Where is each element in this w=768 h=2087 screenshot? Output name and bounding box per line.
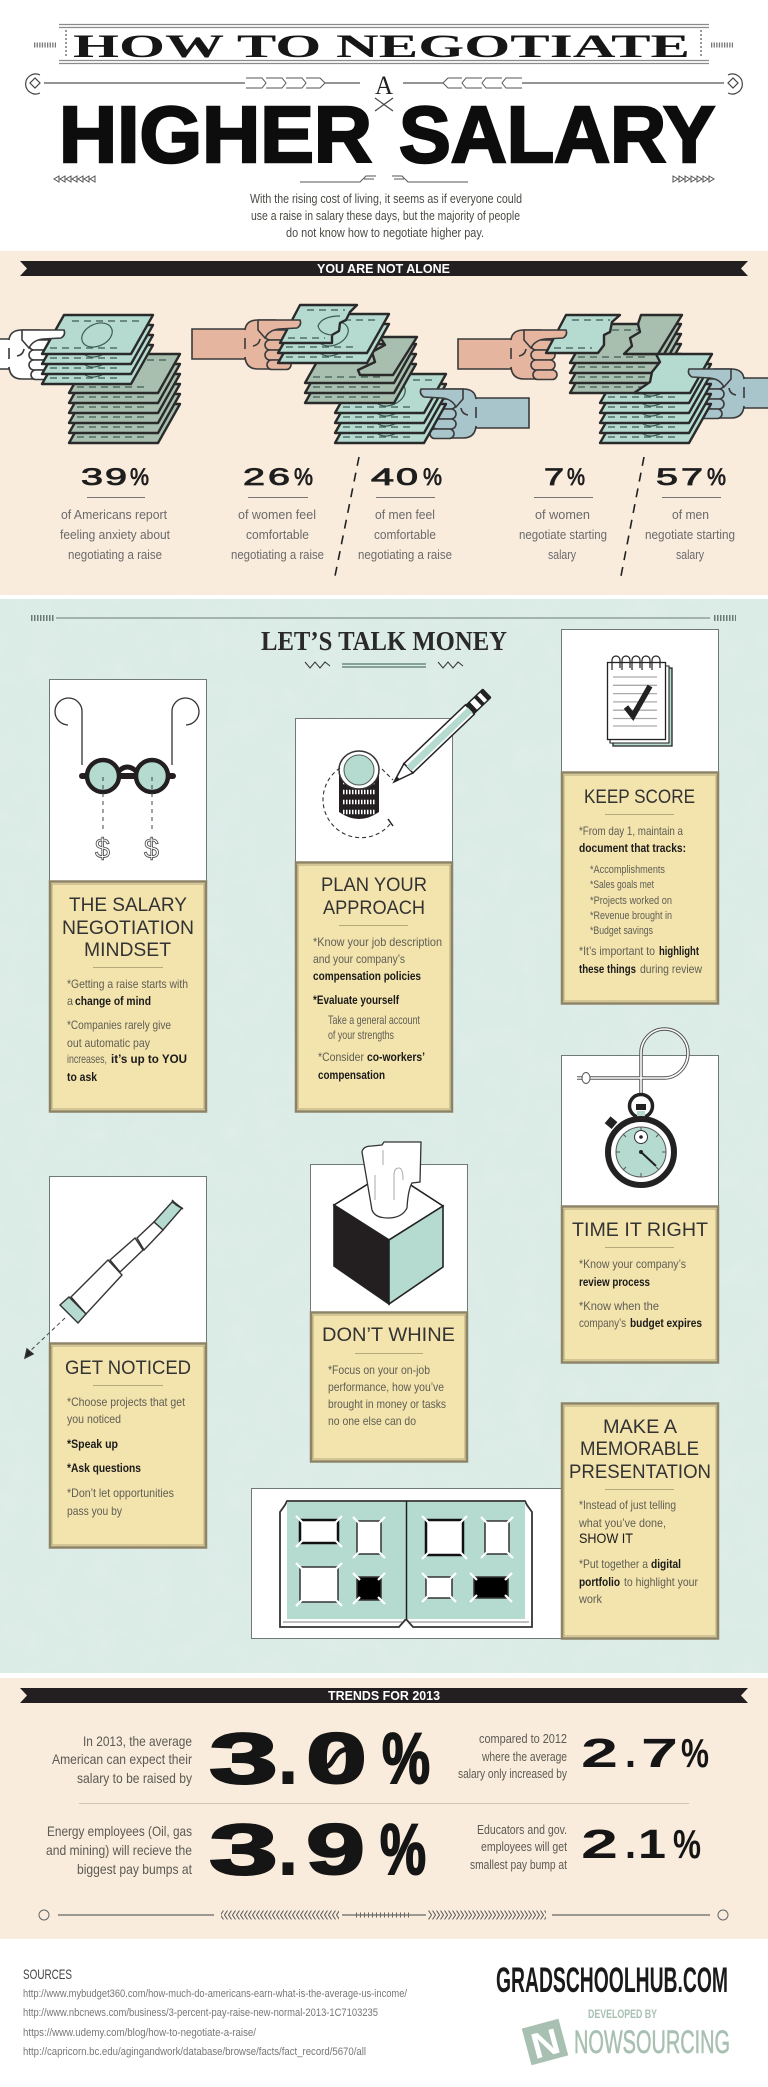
body text: presentation tips: *Instead of just telling [579,1498,676,1512]
card: keep score text: *Projects worked on [590,895,672,907]
card: get noticed text: you noticed [67,1412,121,1426]
text: energy employees: Energy employees (Oil, gas [47,1823,192,1839]
card: time it right text: *Know when the [579,1299,659,1313]
stat: 26 percent: 2 [243,464,265,491]
illustration: pink and blue hands with money stacks, 26 and 40 percent [192,305,529,443]
logo: nowsourcing [522,2019,730,2068]
text: compared to 2012: where the average [481,1749,567,1764]
stat: 40 percent: comfortable [374,527,436,542]
big number: 3.9 percent: 9 [306,1811,365,1890]
stat: 40 percent: negotiating a raise [358,547,452,562]
card: keep score text: *It’s important to [579,944,655,958]
text: energy employees: and mining) will recieve the [46,1842,192,1858]
card: mindset text: it’s up to YOU [111,1052,187,1066]
stat: 26 percent [231,464,324,562]
stat: 39 percent [60,464,170,562]
body text: presentation tips: to highlight your [624,1575,698,1589]
stat: 57 percent: salary [676,547,704,562]
stat: 39 percent: % [130,464,149,491]
number: 2.7 percent: 2 [581,1730,618,1776]
text: energy employees: biggest pay bumps at [77,1861,192,1877]
card: get noticed text: *Don’t let opportunities [67,1486,174,1500]
body text: presentation tips [578,1498,698,1606]
text: compared to 2012: compared to 2012 [479,1731,567,1746]
intro text: use a raise in salary these days, but the majority of people [251,208,520,223]
stat: 26 percent: 6 [268,464,290,491]
stat: 57 percent [645,464,735,562]
stat: 57 percent: negotiate starting [645,527,735,542]
card: don't whine text: DON’T WHINE [322,1325,455,1346]
number: 2.7 percent: 7 [641,1730,678,1776]
card: keep score text: *Budget savings [590,925,653,937]
big number: 3.0 percent: 0 [306,1720,367,1799]
panel: don't whine [310,1142,468,1462]
card: mindset text [50,882,206,1112]
icon: telescope [25,1200,183,1358]
card: plan text: PLAN YOUR [321,875,427,896]
card: get noticed text: GET NOTICED [65,1358,191,1379]
heading: make a memorable presentation: MEMORABLE [580,1439,699,1460]
heading: make a memorable presentation: MAKE A [603,1417,677,1438]
number: 2.7 percent: . [625,1730,636,1776]
card: keep score text: during review [640,962,702,976]
card: get noticed text: *Choose projects that get [67,1395,186,1409]
card: mindset text: *Getting a raise starts with [67,977,188,991]
panel: you are not alone [0,251,768,595]
text: compared to 2012: salary only increased by [458,1766,567,1781]
stat: 39 percent: feeling anxiety about [60,527,170,542]
card: mindset text: MINDSET [84,940,171,961]
illustration: white hand holding money stacks [0,315,180,443]
stat: 40 percent [358,464,452,562]
card: keep score text: KEEP SCORE [584,787,695,808]
text: educators and government: smallest pay bump at [470,1857,567,1872]
card: mindset text: THE SALARY [69,895,187,916]
panel: the salary negotiation mindset [50,680,206,1112]
text: energy employees [46,1823,192,1877]
sources: http://capricorn.bc.edu/agingandwork/database/browse/facts/fact_record/5670/all [23,2046,366,2058]
card: plan text: and your company’s [313,952,405,966]
card: keep score text: highlight [659,944,699,958]
big number: 3.0 percent: . [279,1720,297,1799]
card: time it right text: company’s [579,1316,626,1330]
heading: make a memorable presentation [569,1417,711,1483]
dashed divider 1 [335,457,359,576]
ribbon heading: you are not alone: YOU ARE NOT ALONE [317,262,450,276]
big number: 3.0 percent [209,1720,430,1799]
big number: 3.9 percent [209,1811,426,1890]
card: mindset text: change of mind [75,994,151,1008]
ribbon heading: trends for 2013 [20,1688,748,1703]
dashed divider 2 [621,457,644,576]
stat: 7 percent: of women [535,507,590,522]
card: plan text: *Know your job description [313,935,442,949]
panel: portfolio book [252,1488,562,1638]
icon: stopwatch [577,1029,688,1185]
big number: 3.9 percent: % [380,1811,426,1890]
text: average raise 2013: In 2013, the average [83,1733,192,1749]
ornament line with the word A [26,71,742,111]
stat: 7 percent [519,464,607,562]
footer [23,1961,730,2068]
card: mindset text: to ask [67,1070,97,1084]
body text: presentation tips: SHOW IT [579,1530,633,1546]
card: time it right text: TIME IT RIGHT [572,1220,708,1241]
card: get noticed text: *Speak up [67,1437,118,1451]
text: compared to 2012 [458,1731,567,1781]
intro text: do not know how to negotiate higher pay. [286,225,484,240]
card: time it right text: budget expires [630,1316,702,1330]
title: higher salary: SALARY [399,90,715,179]
sources: SOURCES [23,1966,72,1982]
stat: 7 percent: 7 [544,464,564,491]
panel: keep score [562,630,718,1004]
card: keep score text: these things [579,962,636,976]
stat: 7 percent: negotiate starting [519,527,607,542]
body text: presentation tips: *Put together a [579,1557,648,1571]
heading: make a memorable presentation: PRESENTATION [569,1462,711,1483]
stat: 26 percent: of women feel [238,507,316,522]
big number: 3.9 percent: 3 [209,1811,278,1890]
text: educators and government: Educators and gov. [477,1822,567,1837]
card: keep score text: *Accomplishments [590,864,665,876]
title: higher salary [59,90,715,179]
stat: 40 percent: of men feel [375,507,435,522]
card: don't whine text: *Focus on your on-job [328,1363,430,1377]
number: 2.1 percent [581,1821,701,1867]
card: plan text: Take a general account [328,1013,420,1027]
title banner: how to negotiate: HOW TO NEGOTIATE [73,29,690,65]
title: higher salary: HIGHER [59,90,372,179]
stat: 39 percent: 9 [105,464,127,491]
ornament line with the word A: A [375,71,393,100]
card: plan text [296,862,452,1112]
card: keep score text: *Revenue brought in [590,910,672,922]
card: plan text: of your strengths [328,1028,394,1042]
card: plan text: APPROACH [323,898,425,919]
heading: let's talk money: LET’S TALK MONEY [261,626,507,656]
icon: coin stack and dashed circle [323,751,393,838]
ribbon heading: you are not alone [20,261,748,276]
heading: let's talk money [261,626,507,668]
stat: 39 percent: 3 [81,464,103,491]
card: time it right text: review process [579,1275,650,1289]
card: plan text: compensation [318,1068,385,1082]
card: get noticed text: *Ask questions [67,1461,141,1475]
header [26,24,742,240]
body text: presentation tips: portfolio [579,1575,620,1589]
stat: 39 percent: negotiating a raise [68,547,162,562]
small ornaments under title [54,176,714,182]
stat: 26 percent: negotiating a raise [231,547,324,562]
stat: 57 percent: % [707,464,726,491]
sources [23,1966,408,2058]
stat: 7 percent: % [567,464,585,491]
card: don't whine text: brought in money or tasks [328,1397,446,1411]
card: plan text: *Evaluate yourself [313,993,400,1007]
stat: 26 percent: % [294,464,313,491]
stat: 40 percent: % [423,464,442,491]
stat: 26 percent: comfortable [246,527,309,542]
icon: notepad with checkmark [608,656,672,746]
stat: 57 percent: of men [672,507,709,522]
number: 2.1 percent: % [673,1821,701,1867]
card: get noticed text: pass you by [67,1504,122,1518]
icon: tissue box [334,1142,443,1304]
sources: https://www.udemy.com/blog/how-to-negotiate-a-raise/ [23,2027,257,2039]
panel: make a memorable presentation [562,1404,718,1638]
big number: 3.9 percent: . [279,1811,297,1890]
big number: 3.0 percent: % [382,1720,430,1799]
stat: 39 percent: of Americans report [61,507,167,522]
sources: http://www.nbcnews.com/business/3-percent-pay-raise-new-normal-2013-1C7103235 [23,2007,378,2019]
text: average raise 2013: salary to be raised by [77,1770,192,1786]
card: mindset text: NEGOTIATION [62,918,194,939]
stat: 40 percent: 0 [396,464,418,491]
icon: glasses with dollar signs [55,698,199,864]
number: 2.1 percent: . [625,1821,636,1867]
text: educators and government: employees will get [481,1839,567,1854]
panel: get noticed [25,1176,206,1548]
card: don't whine text: no one else can do [328,1414,416,1428]
icon: glasses with dollar signs: $ [144,833,159,864]
card: don't whine text [311,1312,467,1462]
card: plan text: *Consider [318,1050,364,1064]
body text: presentation tips: digital [651,1557,681,1571]
icon: open portfolio book [280,1501,532,1627]
card: keep score text [562,772,718,1004]
text: average raise 2013 [52,1733,192,1786]
card: mindset text: *Companies rarely give [67,1018,171,1032]
icon: pencil [390,688,492,787]
body text: presentation tips: what you’ve done, [578,1516,666,1530]
bottom ornament [39,1910,728,1920]
card: time it right text: *Know your company’s [579,1257,686,1271]
card: time it right text [562,1206,718,1362]
number: 2.7 percent [581,1730,709,1776]
text: average raise 2013: American can expect their [52,1751,192,1767]
section: let's talk money [0,599,768,1673]
sources: http://www.mybudget360.com/how-much-do-americans-earn-what-is-the-average-us-income/ [23,1988,408,2000]
stat: 40 percent: 4 [371,464,394,491]
text: educators and government [470,1822,567,1872]
card: plan text: co-workers’ [367,1050,425,1064]
number: 2.7 percent: % [681,1730,709,1776]
panel: trends for 2013 [0,1678,768,1939]
illustration: pink and blue hands with money stacks, 7 and 57 percent [458,315,768,443]
panel: time it right [562,1029,718,1362]
icon: glasses with dollar signs: $ [95,833,110,864]
number: 2.1 percent: 2 [581,1821,618,1867]
card: keep score text: *Sales goals met [590,879,654,891]
card: get noticed text [50,1344,206,1548]
number: 2.1 percent: 1 [638,1821,666,1867]
card: mindset text: increases, [67,1052,107,1066]
title banner: how to negotiate [34,24,733,65]
intro text [250,191,522,240]
card: mindset text: a [67,994,73,1008]
stat: 57 percent: 7 [681,464,703,491]
credit: developed by: DEVELOPED BY [588,2009,657,2021]
card: plan text: compensation policies [313,969,421,983]
big number: 3.0 percent: 3 [209,1720,278,1799]
body text: presentation tips: work [578,1592,603,1606]
card: keep score text: *From day 1, maintain a [579,824,683,838]
stat: 57 percent: 5 [656,464,678,491]
stat: 7 percent: salary [548,547,576,562]
ribbon heading: trends for 2013: TRENDS FOR 2013 [328,1689,440,1703]
card: mindset text: out automatic pay [67,1036,150,1050]
card: don't whine text: performance, how you’ve [328,1380,444,1394]
intro text: With the rising cost of living, it seems as if everyone could [250,191,522,206]
card: keep score text: document that tracks: [579,841,686,855]
panel: plan your approach [296,688,492,1112]
logo: nowsourcing: N [527,2020,564,2067]
